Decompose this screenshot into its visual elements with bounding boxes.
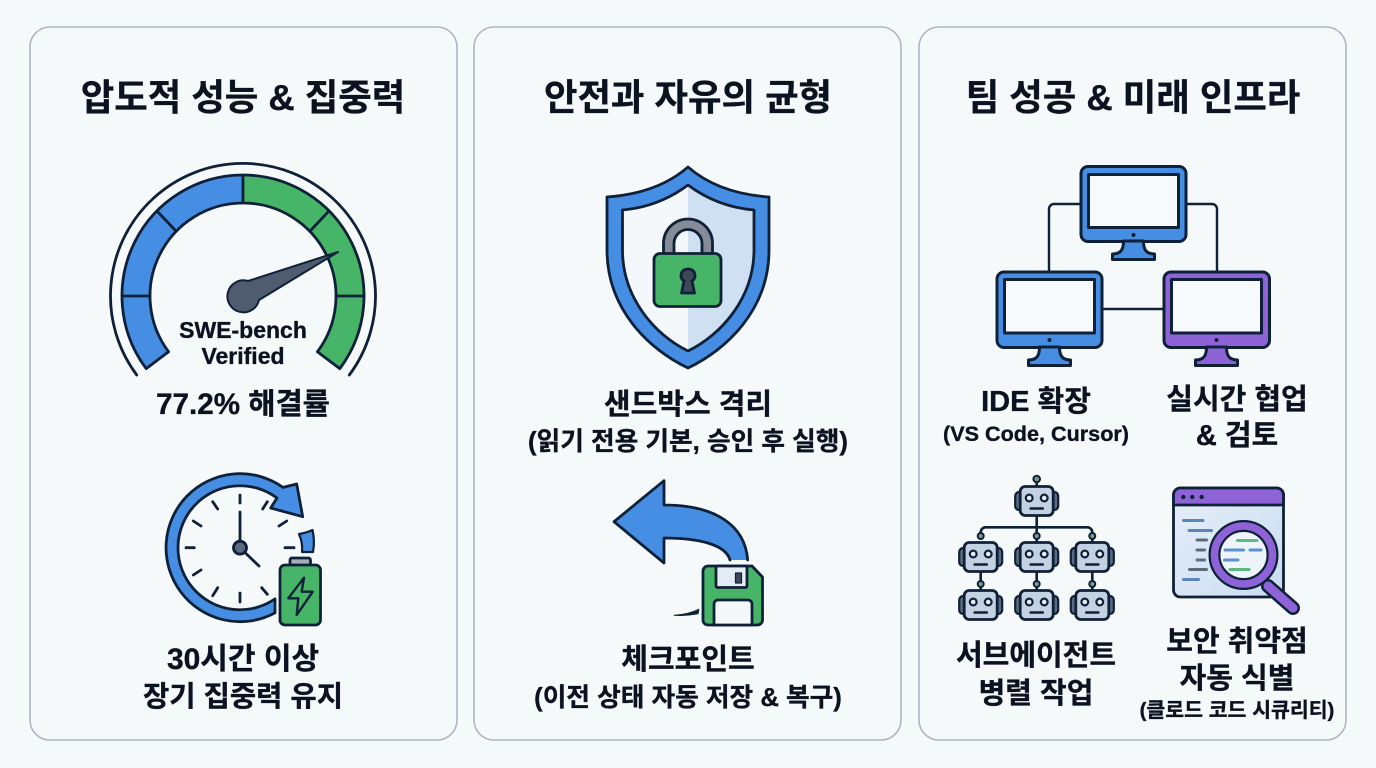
heading: safety and freedom: 안전과 자유의 균형 [544,77,832,118]
heading: performance and focus: 압도적 성능 & 집중력 [81,77,405,118]
icon: connected monitors [997,166,1270,366]
panel: team success and future infrastructure [919,27,1346,740]
label: realtime collaboration: & 검토 [1196,419,1278,452]
label: parallel sub-agents: 병렬 작업 [979,677,1093,710]
panel: safety and freedom [474,27,901,740]
label: checkpoints: 체크포인트 [621,643,755,676]
label: security vulnerability detection: 보안 취약점 [1166,625,1308,658]
label: checkpoints [534,643,842,712]
label: realtime collaboration: 실시간 협업 [1166,383,1308,416]
icon: shield with padlock [607,167,769,368]
label: sustained focus: 장기 집중력 유지 [143,681,343,713]
label: IDE extension: (VS Code, Cursor) [943,421,1129,446]
label: sustained focus: 30시간 이상 [167,643,319,676]
label: security vulnerability detection: (클로드 코드 시큐리티) [1140,699,1334,722]
gauge label [179,317,307,369]
icon: SWE-bench gauge [110,163,375,375]
label: parallel sub-agents [956,639,1116,710]
icon: checkpoint arrow and floppy disk [614,481,762,625]
label: sandbox isolation [528,388,848,456]
label: IDE extension [943,385,1129,446]
icon: code window with magnifier [1174,488,1293,608]
label: IDE extension: IDE 확장 [981,385,1091,418]
label: security vulnerability detection [1140,625,1334,722]
label: sandbox isolation: (읽기 전용 기본, 승인 후 실행) [528,427,848,456]
heading: team success: 팀 성공 & 미래 인프라 [966,77,1300,118]
label: checkpoints: (이전 상태 자동 저장 & 복구) [534,683,842,712]
label: security vulnerability detection: 자동 식별 [1180,662,1294,695]
icon: clock with battery [166,474,320,625]
label: sustained focus [143,643,343,713]
stat: resolution rate: 77.2% 해결률 [156,388,330,421]
gauge label: SWE-bench [179,317,307,343]
label: sandbox isolation: 샌드박스 격리 [604,388,772,421]
icon: sub-agent robot tree [959,476,1114,620]
label: realtime collaboration [1166,383,1308,452]
label: parallel sub-agents: 서브에이전트 [956,639,1116,672]
panel: performance and focus [30,27,457,740]
gauge label: Verified [201,343,285,369]
